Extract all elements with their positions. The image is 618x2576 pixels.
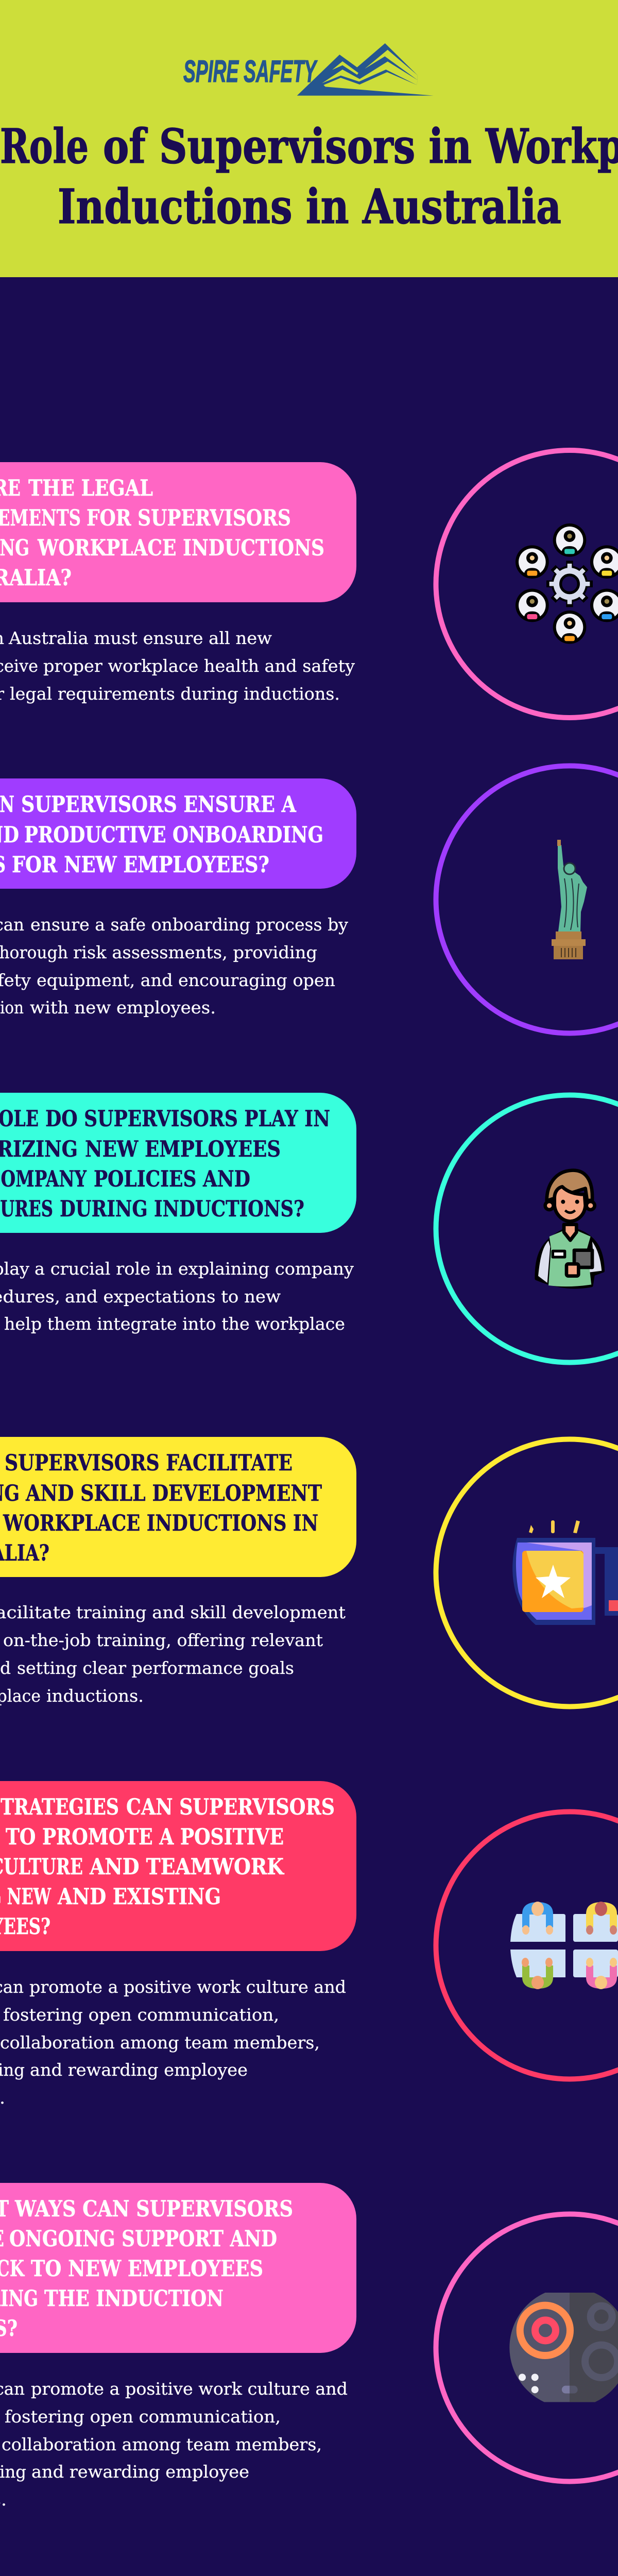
icon ring [436, 1095, 618, 1362]
answer text: and rewarding employee [31, 2462, 249, 2482]
question heading [0, 2196, 293, 2342]
answer text: and rewarding employee [30, 2060, 248, 2080]
question heading: PRODUCTIVE ONBOARDING [24, 822, 323, 848]
question heading: TO PROMOTE A POSITIVE [6, 1824, 284, 1850]
answer text [0, 1977, 346, 2108]
heading pill [0, 462, 356, 602]
panel: legal requirements [0, 450, 618, 718]
question heading: CAN SUPERVISORS [126, 1794, 335, 1820]
answer text: help them integrate into the workplace [4, 1314, 345, 1334]
answer text [0, 914, 348, 1018]
icon: star mug [512, 1520, 618, 1625]
answer text: ensure a safe onboarding process by [30, 914, 348, 935]
question heading: ONGOING SUPPORT AND [9, 2226, 277, 2252]
question heading: AND EXISTING [57, 1884, 221, 1910]
question heading [0, 476, 324, 591]
title [0, 118, 618, 234]
icon ring [436, 450, 618, 718]
answer text: fostering open communication, [5, 2406, 281, 2427]
question heading: THE LEGAL [28, 476, 153, 501]
answer text: inductions. [46, 1686, 144, 1706]
question heading: SUPERVISORS ENSURE A [21, 792, 297, 818]
heading pill [0, 2183, 356, 2353]
answer text: Australia must ensure all new [8, 628, 272, 648]
question heading [0, 1106, 330, 1222]
answer text: training and skill development [76, 1602, 346, 1622]
icon ring [436, 766, 618, 1033]
logo: Spire Safety [183, 43, 434, 96]
question heading: NEW EMPLOYEES [85, 1137, 281, 1162]
icon: team around a gear [516, 523, 618, 644]
icon: supervisor with clipboard [537, 1171, 603, 1287]
answer text: fostering open communication, [3, 2005, 279, 2025]
answer text [0, 628, 355, 704]
icon ring [436, 1439, 618, 1706]
panel: ongoing support [0, 2183, 618, 2510]
question heading: FOR NEW EMPLOYEES? [12, 852, 269, 878]
answer text: a crucial role in explaining company [35, 1259, 354, 1279]
header band [0, 0, 618, 277]
question heading: AND TEAMWORK [89, 1854, 284, 1880]
heading pill [0, 1781, 356, 1951]
icon: speaker [509, 2287, 618, 2408]
question heading: AND SKILL DEVELOPMENT [25, 1481, 322, 1506]
panel: training and skill development [0, 1437, 618, 1706]
icon ring [436, 2214, 618, 2481]
question heading: SUPERVISORS FACILITATE [5, 1450, 293, 1476]
logo: Spire Safety: SPIRE SAFETY [183, 54, 318, 89]
question heading [0, 1794, 335, 1940]
answer text: collaboration among team members, [2, 2434, 322, 2454]
answer text: proper workplace health and safety [43, 656, 355, 676]
question heading: WORKPLACE INDUCTIONS [37, 535, 324, 561]
question heading: WAYS CAN SUPERVISORS [14, 2196, 293, 2222]
icon: Statue of Liberty [552, 840, 587, 959]
answer text: setting clear performance goals [17, 1658, 294, 1678]
icon: team around desks [510, 1902, 618, 1989]
answer text [0, 1602, 346, 1706]
panel: positive work culture [0, 1781, 618, 2108]
heading pill [0, 1437, 356, 1577]
question heading: FOR SUPERVISORS [87, 505, 291, 531]
question heading [0, 792, 323, 878]
heading pill [0, 1093, 356, 1233]
answer text [0, 2379, 348, 2510]
title: of Supervisors in [103, 118, 472, 174]
answer text: promote a positive work culture and [31, 2379, 348, 2399]
panel: safe onboarding [0, 766, 618, 1033]
answer text: promote a positive work culture and [29, 1977, 346, 1997]
question heading: POLICIES AND [94, 1166, 250, 1192]
question heading [0, 1450, 322, 1566]
question heading: THE INDUCTION [44, 2286, 224, 2312]
answer text: collaboration among team members, [0, 2032, 320, 2053]
answer text: with new employees. [30, 997, 216, 1018]
heading pill [0, 778, 356, 889]
icon ring [436, 1811, 618, 2079]
answer text: on-the-job training, offering relevant [3, 1630, 323, 1650]
question heading: WORKPLACE INDUCTIONS IN [3, 1511, 318, 1536]
panel: company policies [0, 1093, 618, 1362]
question heading: DURING INDUCTIONS? [60, 1196, 304, 1222]
answer text: equipment, and encouraging open [37, 970, 335, 990]
question heading: DO SUPERVISORS PLAY IN [45, 1106, 330, 1132]
answer text: risk assessments, providing [73, 942, 317, 962]
answer text [0, 1259, 354, 1334]
title: Role [0, 118, 89, 174]
question heading: TO NEW EMPLOYEES [31, 2256, 263, 2282]
answer text: legal requirements during inductions. [10, 684, 340, 704]
answer text: and expectations to new [65, 1286, 281, 1307]
